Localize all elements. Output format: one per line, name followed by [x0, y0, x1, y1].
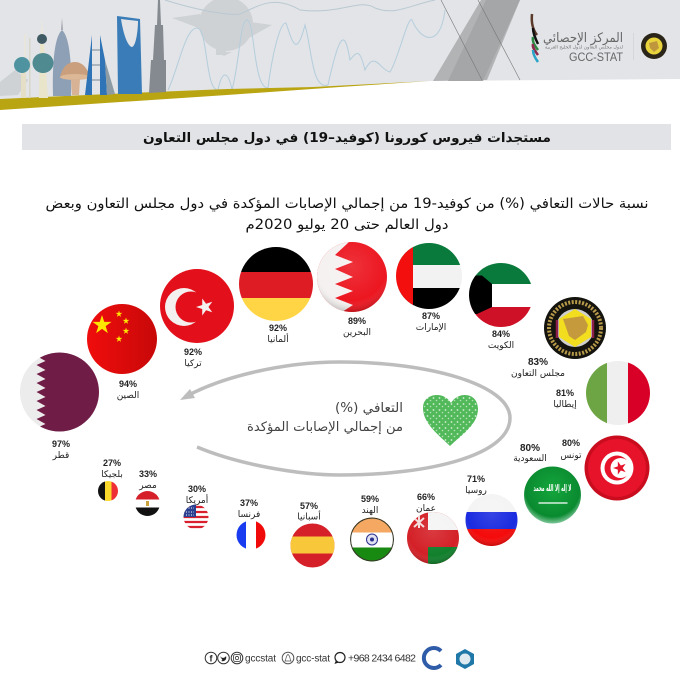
logo: certification C [424, 648, 441, 668]
label: Bahrain: 89% [348, 316, 366, 326]
label: Qatar: قطر [52, 451, 69, 461]
label: Bahrain: البحرين [343, 328, 371, 338]
label: Italy [553, 388, 577, 410]
label: Belgium [101, 458, 123, 480]
label: Kuwait [488, 329, 514, 351]
label: Germany [267, 323, 289, 345]
label: India: الهند [362, 506, 378, 516]
legend text: التعافي (%) [335, 401, 403, 416]
legend text [247, 401, 403, 435]
header banner [0, 0, 680, 110]
subtitle line 1: نسبة حالات التعافي (%) من كوفيد-19 من إجمالي الإصابات المؤكدة في دول مجلس التعاون وبعض [46, 196, 648, 212]
logo ribbon [532, 14, 538, 62]
logo: GCC-STAT [532, 14, 624, 64]
label: GCC: مجلس التعاون [511, 369, 565, 379]
GCC emblem header [641, 33, 667, 59]
label: Oman [416, 492, 436, 514]
label: Belgium: بلجيكا [101, 470, 123, 480]
label: Germany: ألمانيا [267, 333, 289, 345]
flag: Saudi Arabia: لا إله إلا الله محمد [534, 484, 572, 494]
icon: twitter [218, 652, 229, 664]
label: Turkey: 92% [184, 347, 202, 357]
handle: gccstat: gccstat [245, 654, 276, 664]
logo: TUV [456, 649, 474, 669]
label: Egypt [138, 469, 157, 491]
label: Egypt: مصر [138, 481, 157, 491]
flag: Bahrain [317, 242, 387, 312]
flag: Spain [290, 522, 334, 568]
label: Tunisia: 80% [562, 438, 580, 448]
label: China [117, 379, 139, 401]
wave lines [168, 10, 445, 90]
flag: Qatar [20, 352, 100, 432]
footer contacts [205, 648, 474, 669]
flag: China [87, 304, 157, 374]
label: UAE: الإمارات [416, 323, 446, 333]
label: Russia [465, 474, 487, 496]
label: France [238, 498, 260, 520]
label: India [361, 494, 379, 516]
label: UAE [416, 311, 446, 333]
label: Turkey [184, 347, 202, 369]
label: Qatar [52, 439, 70, 461]
label: Tunisia [560, 438, 582, 461]
logo latin name: GCC-STAT [569, 50, 624, 64]
icon: snapchat [282, 652, 294, 664]
icon: whatsapp [335, 652, 345, 664]
label: Egypt: 33% [139, 469, 157, 479]
label: France: فرنسا [238, 510, 260, 520]
arrow: recovery ellipse [180, 362, 510, 475]
subtitle line 2: دول العالم حتى 20 يوليو 2020م [246, 217, 448, 233]
flag: UAE [396, 243, 462, 310]
label: Oman: عمان [416, 504, 436, 514]
label: Spain [297, 501, 321, 522]
flag: India [350, 518, 394, 562]
label: GCC [511, 357, 565, 379]
logo Arabic name: المركز الإحصائي [543, 31, 623, 46]
flag: Germany [239, 247, 313, 322]
label: Italy: 81% [556, 388, 574, 398]
flag: Turkey [160, 269, 234, 343]
phone number: +968 2434 6482 [348, 652, 416, 664]
landmark: dome [60, 62, 90, 95]
label: Russia: روسيا [465, 486, 487, 496]
label: Kuwait: 84% [492, 329, 510, 339]
icon: facebook: f [210, 654, 214, 664]
flag: Belgium [98, 481, 118, 501]
label: GCC: 83% [528, 357, 548, 368]
icon: instagram [231, 652, 243, 664]
landmark: tower [53, 18, 71, 96]
label: Kuwait: الكويت [488, 341, 514, 351]
flag: Italy [586, 361, 650, 425]
label: Belgium: 27% [103, 458, 121, 468]
gold wedge [0, 81, 430, 110]
label: India: 59% [361, 494, 379, 504]
label: Germany: 92% [269, 323, 287, 333]
label: Spain: 57% [300, 501, 318, 511]
label: Saudi Arabia: 80% [520, 443, 540, 454]
gray diagonal bands [433, 0, 520, 81]
label: USA: 30% [188, 484, 206, 494]
label: Spain: أسبانيا [297, 510, 321, 522]
label: Russia: 71% [467, 474, 485, 484]
flag: Saudi Arabia [524, 466, 581, 524]
label: USA: أمريكا [186, 494, 208, 506]
landmark: Kingdom Tower [117, 16, 142, 94]
landmark: Kuwait Towers [14, 16, 54, 98]
title bar [22, 124, 671, 150]
virus silhouette [0, 0, 272, 96]
label: Turkey: تركيا [184, 359, 202, 369]
handle: gcc-stat: gcc-stat [296, 654, 330, 664]
label: Qatar: 97% [52, 439, 70, 449]
label: UAE: 87% [422, 311, 440, 321]
flag: Egypt [136, 491, 160, 516]
flag: Russia [466, 494, 518, 546]
flag: France [236, 520, 266, 550]
flag: Oman [407, 512, 459, 564]
label: USA [186, 484, 208, 506]
label: China: الصين [117, 391, 139, 401]
label: Tunisia: تونس [560, 451, 582, 461]
flag: USA [184, 504, 208, 528]
flag: GCC emblem [544, 297, 606, 359]
flag: Kuwait [469, 263, 531, 327]
label: Italy: إيطاليا [553, 400, 577, 410]
label: Oman: 66% [417, 492, 435, 502]
label: China: 94% [119, 379, 137, 389]
flag: Tunisia [584, 436, 650, 500]
label: France: 37% [240, 498, 258, 508]
logo separator [633, 33, 634, 60]
icon: green heart [423, 395, 478, 446]
landmark: Bahrain WTC [85, 35, 115, 95]
label: Saudi Arabia: السعودية [513, 454, 547, 464]
landmark: Burj Khalifa [149, 0, 166, 93]
legend text: من إجمالي الإصابات المؤكدة [247, 420, 403, 435]
icon: facebook [205, 652, 217, 664]
logo subtitle: لدول مجلس التعاون لدول الخليج العربية [545, 46, 623, 50]
title: مستجدات فيروس كورونا (كوفيد–19) في دول مجلس التعاون [143, 131, 551, 146]
label: Saudi Arabia [513, 443, 547, 464]
label: Bahrain [343, 316, 371, 338]
